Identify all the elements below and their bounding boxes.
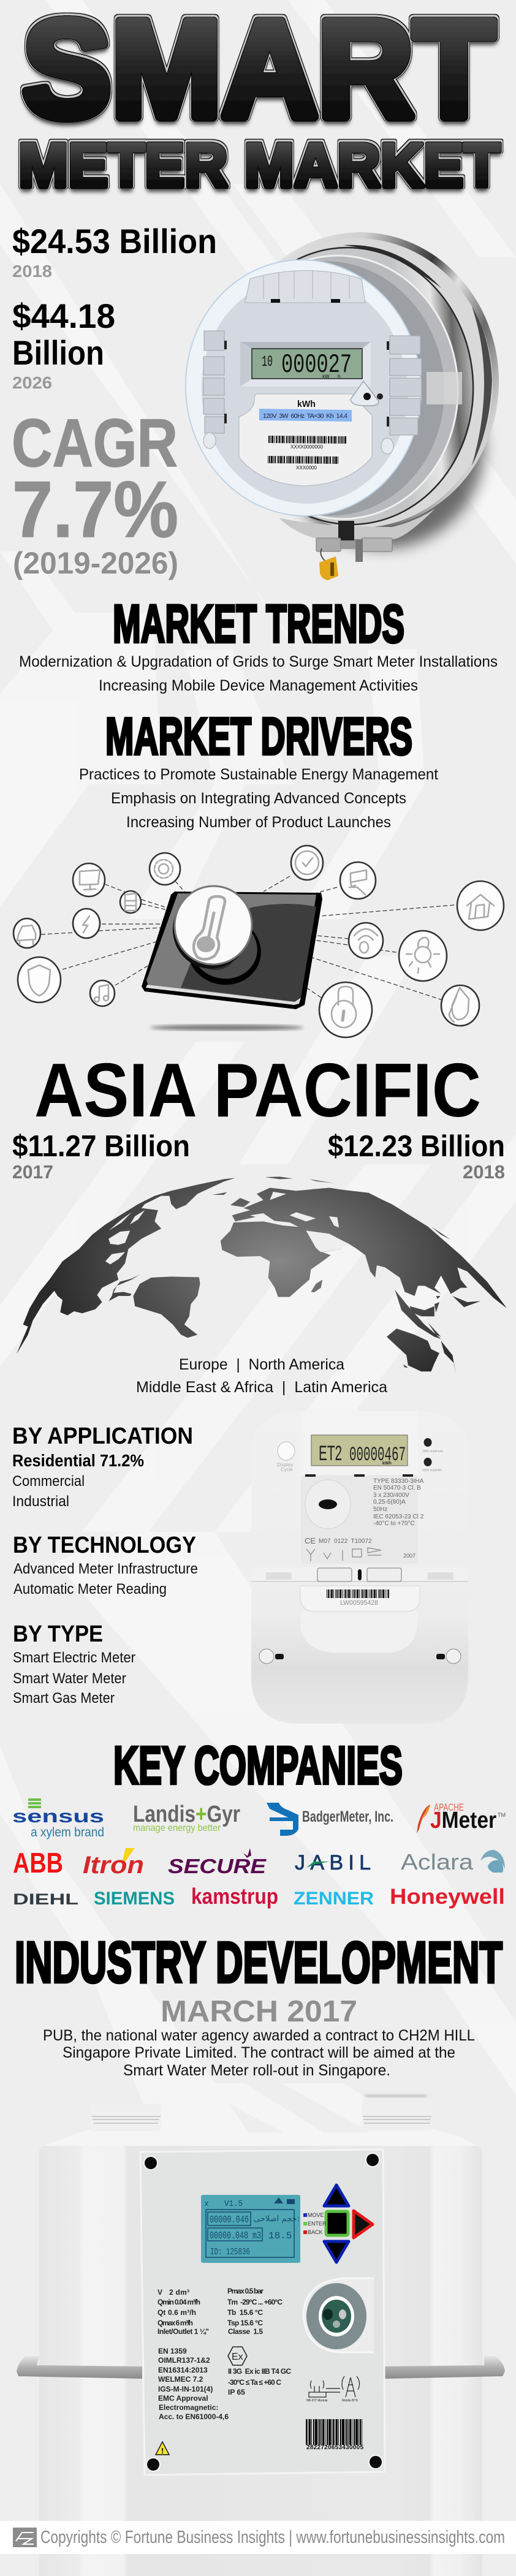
gas meter buttons [303,2185,373,2262]
meter display [311,1435,408,1466]
logo: Apache JMeter: APACHE [434,1801,464,1813]
other regions: Europe | North America [179,1356,344,1373]
meter LCD [252,349,362,381]
gas meter specifications: OIMLR137-1&2 [158,2356,210,2365]
Africa [221,1221,331,1297]
logo: Diehl: DIEHL [13,1891,78,1908]
world map [17,1176,507,1374]
logo: Landis+Gyr: manage energy better [133,1823,221,1833]
industry development text: Singapore Private Limited. The contract will be aimed at the [63,2044,455,2061]
segment: by application [12,1423,193,1510]
logo: Siemens: SIEMENS [94,1888,175,1909]
logo: ABB: ABB [13,1847,63,1879]
logo: Secure [168,1848,267,1877]
industry development text: PUB, the national water agency awarded a contract to CH2M HILL [43,2027,475,2044]
South America [133,1276,200,1338]
segment: by technology: Advanced Meter Infrastructure [13,1561,198,1577]
icon bubbles [13,846,504,1037]
meter nameplate: XXXX0000000 [290,444,324,450]
meter spec plate: CE [305,1536,316,1545]
other regions: Middle East & Africa | Latin America [136,1379,387,1396]
gas meter specifications: Tsp 15.6 °C [227,2319,263,2327]
gas meter caps [43,2094,478,2146]
logo: Sensus [12,1798,104,1839]
icon: warning triangle [156,2442,169,2455]
market trends list [19,653,498,694]
gas meter specifications [157,2287,291,2421]
gas meter specifications: EMC Approval [158,2394,208,2403]
meter screws [259,1649,461,1664]
stat: 2026 market size [12,297,115,392]
gas meter specifications: Qt 0.6 m³/h [157,2308,196,2317]
gas meter specifications: V 2 dm³ [157,2288,189,2297]
gas meter specifications: Inlet/Outlet 1 ¼" [157,2327,209,2336]
icon: radio module and tower [306,2376,360,2403]
gas meter specifications: Qmax 6 m³/h [157,2319,193,2327]
segment: by application: Industrial [12,1493,69,1510]
stat: 2026 market size: 2026 [12,373,52,392]
market drivers list: Practices to Promote Sustainable Energy Management [79,766,438,783]
gas meter barcode: 2822720653430005 [306,2444,363,2451]
gas meter buttons: ENTER [308,2221,327,2227]
gas meter specifications: EN 1359 [158,2347,187,2355]
footer [0,2521,516,2554]
gas meter LCD: ID: 125836 [210,2247,250,2257]
meter nameplate: kWh [297,399,316,409]
stat: 2018 market size [12,222,217,281]
icon: warning triangle: ! [161,2446,164,2455]
segment: by type: Smart Gas Meter [13,1690,115,1707]
industry development text [43,2027,475,2079]
gas meter LCD: حجم اصلاحی: [254,2214,300,2224]
gas meter optical port [303,2278,374,2352]
gas meter faceplate [140,2150,385,2475]
gas meter body [39,2146,482,2576]
logo: Badger Meter [267,1803,393,1836]
meter LCD: h [338,374,340,379]
logo: Zenner: ZENNER [294,1888,374,1909]
logo: Apache JMeter: TM [498,1812,506,1818]
meter clamp and yellow tag [279,509,435,580]
gas meter buttons: MOVE [308,2212,324,2218]
market drivers list: Emphasis on Integrating Advanced Concepts [111,790,406,807]
meter buttons and leds: Cycle [281,1467,294,1472]
icon: radio module and tower: NB-IOT Module [306,2399,328,2403]
stat: Asia Pacific 2017 [12,1130,190,1183]
logos: key companies [12,1798,506,1909]
icon glyphs [17,851,494,1028]
segment: by application: Residential 71.2% [12,1451,144,1470]
gas meter specifications: Tm -29°C ... +60°C [227,2298,283,2306]
meter switches and barcode: LW00595428 [340,1599,378,1607]
gas meter strap [17,2356,505,2379]
thermometer dial [165,879,267,991]
gas meter specifications: EN16314:2013 [158,2366,208,2374]
meter spec plate: IEC 62053-23 Cl 2 [373,1513,424,1520]
meter nameplate: XXX0000 [296,465,317,471]
meter buttons and leds: Display [277,1462,293,1468]
stat: 2018 market size: $24.53 Billion [12,222,217,260]
segment: by application: BY APPLICATION [12,1423,193,1449]
gas meter LCD: V1.5 [224,2199,243,2209]
gas meter specifications: IGS-M-IN-101(4) [158,2385,213,2393]
logo: Landis+Gyr: Landis+Gyr [133,1801,240,1827]
logo: Apache JMeter: JMeter [430,1808,496,1833]
logo: Kamstrup: kamstrup [191,1884,278,1909]
gas meter specifications: Pmax 0.5 bar [227,2287,264,2295]
south east Asia and islands [395,1290,480,1339]
meter LCD: 000027 [281,350,352,381]
illustration: smart home tablet with icons [13,846,504,1037]
other regions [136,1356,387,1396]
gas meter specifications: Classe 1.5 [228,2327,263,2336]
gas meter LCD: x [204,2199,209,2208]
meter display: kWh [382,1461,392,1466]
icon: radio module and tower: Mobile BTS [342,2399,359,2403]
market drivers list: Increasing Number of Product Launches [126,814,391,831]
meter nameplate [259,399,352,471]
meter switches and barcode [300,1568,420,1612]
ATEX mark: Ex [232,2352,243,2362]
market drivers list [79,766,438,831]
logo: Aclara [401,1849,505,1874]
meter spec plate: 3 x 230/400V [373,1492,409,1499]
meter nameplate: 120V 3W 60Hz TA=30 Kh 14.4 [263,412,347,420]
segment: by technology: BY TECHNOLOGY [13,1532,196,1558]
gas meter specifications: II 3G Ex ic IIB T4 GC [228,2367,291,2376]
meter spec plate: -40°C to +70°C [373,1520,415,1527]
logo: Honeywell: Honeywell [390,1885,505,1909]
illustration: white smart meter [251,1411,468,1724]
industry development text: Smart Water Meter roll-out in Singapore. [123,2062,390,2079]
meter display: 00000467 [349,1444,406,1466]
logo: Apache JMeter [417,1801,506,1833]
gas meter specifications: Tb 15.6 °C [227,2308,263,2317]
stat: CAGR: 7.7% [12,464,178,554]
tablet shadow [150,1025,303,1031]
gas meter LCD: 00000.048 m3 [210,2230,261,2242]
stat: CAGR: CAGR [12,406,178,481]
logo: Badger Meter: BadgerMeter, Inc. [302,1808,393,1825]
illustration: gas smart meter [17,2094,505,2576]
meter spec plate: 2007 [403,1553,415,1559]
meter display: ET2 [319,1442,342,1465]
meter spec plate [301,1474,424,1564]
logo: Sensus: a xylem brand [31,1825,104,1839]
meter glass and face [173,248,434,528]
segment: by technology [13,1532,198,1597]
meter LCD: kW [322,374,330,379]
North America [17,1178,235,1354]
logo: Jabil: JABIL [295,1851,371,1874]
meter spec plate: EN 50470-3 Cl. B [373,1485,421,1491]
ATEX mark [228,2347,247,2365]
meter spec plate: 50Hz [373,1506,387,1513]
footer logo [13,2528,37,2547]
logo: Itron: Itron [83,1852,144,1879]
gas meter specifications: Electromagnetic: [159,2403,218,2412]
segment: by type: BY TYPE [13,1621,103,1647]
segment: by application: Commercial [12,1473,85,1490]
meter buttons and leds [277,1438,443,1472]
illustration: electric smart meter [173,225,506,580]
Eurasia [232,1188,507,1308]
gas meter LCD [201,2195,300,2263]
meter buttons and leds: 1000 imp/kvarh [422,1450,443,1453]
gas meter specifications: WELMEC 7.2 [158,2375,203,2384]
Australia [387,1328,439,1371]
gas meter barcode [306,2432,363,2451]
stat: Asia Pacific 2018: 2018 [463,1161,505,1183]
segment: by type: Smart Water Meter [13,1670,126,1687]
logo: Secure: SECURE [168,1855,267,1877]
meter tab [427,372,462,404]
stat: Asia Pacific 2018 [328,1130,505,1183]
date: March 2017: MARCH 2017 [161,1995,357,2028]
gas meter LCD: 00000.046 [210,2214,249,2226]
stat: Asia Pacific 2017: $11.27 Billion [12,1130,190,1163]
market trends list: Modernization & Upgradation of Grids to Surge Smart Meter Installations [19,653,498,670]
meter buttons and leds: 1000 imp/kWh [422,1469,442,1472]
title: Smart Meter Market: METER MARKET [18,131,500,200]
stat: 2026 market size: $44.18 [12,297,115,335]
segment: by technology: Automatic Meter Reading [13,1581,167,1597]
stat: Asia Pacific 2017: 2017 [12,1161,53,1183]
logo: Aclara: Aclara [401,1849,474,1874]
gas meter LCD: 18.5 [268,2230,292,2241]
tablet [142,892,322,1009]
connector lines [41,876,454,1000]
segment: by type [13,1621,135,1707]
gas meter specifications: -30°C ≤ Ta ≤ +60 C [228,2378,281,2387]
meter LCD: 10 [262,353,273,371]
stat: CAGR: (2019-2026) [13,546,178,580]
market trends list: Increasing Mobile Device Management Activities [99,677,418,694]
stat: CAGR [12,406,178,580]
gas meter specifications: Qmin 0.04 m³/h [157,2298,200,2306]
gas meter specifications: Acc. to EN61000-4,6 [159,2412,229,2421]
gas meter buttons: BACK [308,2229,323,2235]
meter spec plate: 0,25-5(80)A [373,1499,406,1506]
meter spec plate: TYPE 83330-3IHA [373,1478,424,1485]
stat: 2026 market size: Billion [12,333,104,372]
meter seal [203,381,393,454]
gas meter specifications: IP 65 [228,2388,245,2396]
stat: Asia Pacific 2018: $12.23 Billion [328,1130,505,1163]
meter spec plate: M07 0122 T10072 [319,1538,372,1545]
stat: 2018 market size: 2018 [12,262,52,281]
logo: Sensus: sensus [12,1806,104,1827]
segment: by type: Smart Electric Meter [13,1650,135,1666]
